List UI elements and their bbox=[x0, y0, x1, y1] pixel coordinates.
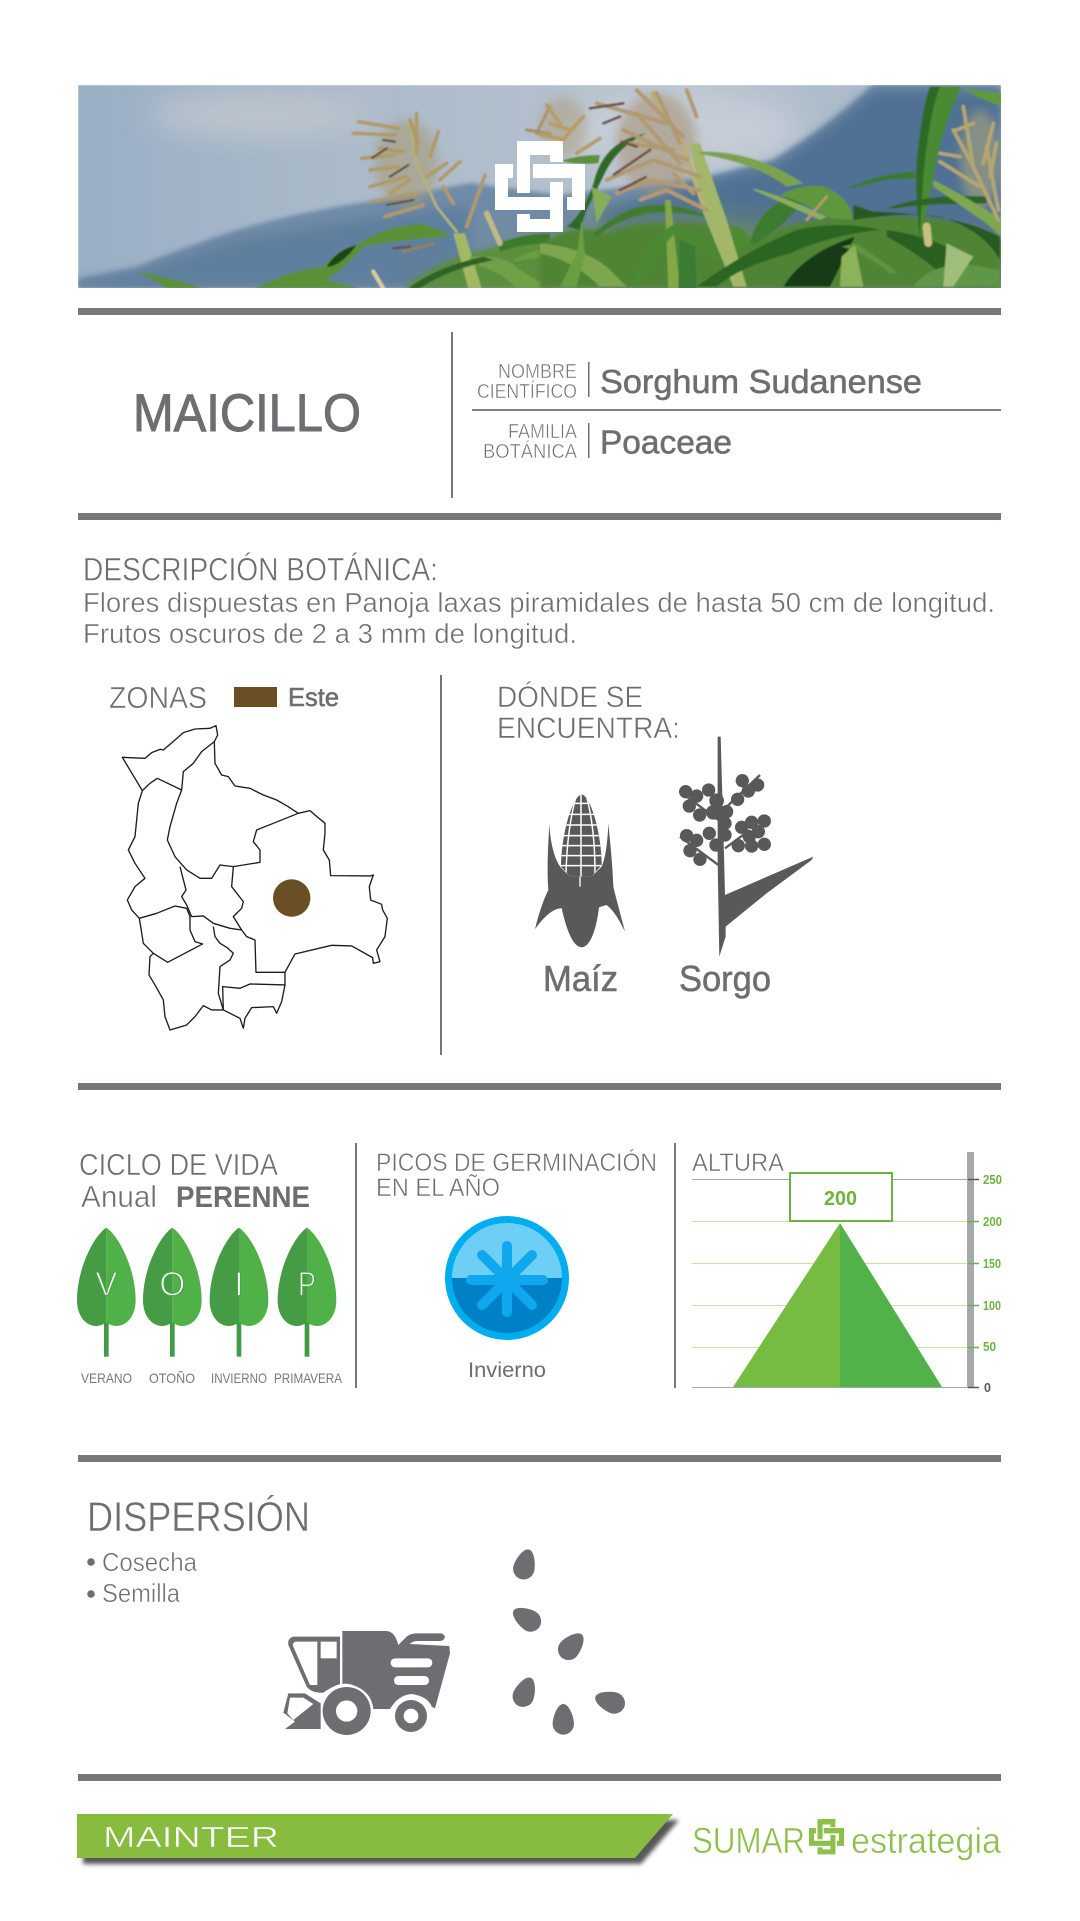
heading: altura: ALTURA bbox=[692, 1149, 784, 1177]
botanical family bbox=[483, 421, 732, 463]
height axis bbox=[967, 1152, 1002, 1395]
botanical family: Poaceae bbox=[600, 424, 732, 460]
season labels: INVIERNO bbox=[211, 1370, 267, 1386]
height axis: 250 bbox=[983, 1173, 1002, 1187]
season labels bbox=[81, 1370, 343, 1386]
value box: 200: 200 bbox=[824, 1188, 857, 1210]
botanical family: FAMILIA bbox=[508, 421, 578, 443]
divider bar bbox=[78, 513, 1001, 520]
text: anual: Anual bbox=[81, 1179, 157, 1214]
panel: life cycle bbox=[77, 1147, 343, 1386]
divider bar bbox=[78, 308, 1001, 315]
leaf: verano: V bbox=[95, 1266, 117, 1304]
scientific name: Sorghum Sudanense bbox=[600, 363, 922, 400]
header photo: sorghum field and mountains bbox=[78, 85, 1002, 288]
leaf: invierno bbox=[210, 1228, 268, 1357]
heading: ciclo de vida: CICLO DE VIDA bbox=[79, 1147, 278, 1182]
heading: zonas: ZONAS bbox=[109, 680, 207, 715]
value box: 200 bbox=[790, 1173, 892, 1221]
heading: picos de germinacion: EN EL AÑO bbox=[376, 1173, 500, 1202]
height axis: 150 bbox=[983, 1257, 1001, 1271]
footer brand: sumar estrategia: estrategia bbox=[851, 1820, 1002, 1861]
label: sorgo: Sorgo bbox=[679, 958, 771, 999]
leaf: verano bbox=[77, 1228, 136, 1357]
text block: botanical description: Flores dispuestas en Panoja laxas piramidales de hasta 50 cm de longitud. bbox=[83, 587, 995, 618]
list: dispersal methods: Semilla bbox=[102, 1578, 180, 1608]
text block: botanical description bbox=[83, 552, 995, 649]
scientific name: CIENTÍFICO bbox=[477, 380, 577, 403]
panel: height chart bbox=[692, 1149, 1002, 1395]
panel: dispersal bbox=[87, 1493, 628, 1735]
text block: botanical description: Frutos oscuros de 2 a 3 mm de longitud. bbox=[83, 618, 577, 649]
zone marker bbox=[273, 879, 310, 917]
footer ribbon: mainter: MAINTER bbox=[103, 1822, 279, 1854]
heading: picos de germinacion bbox=[376, 1148, 657, 1202]
leaf: invierno: I bbox=[234, 1266, 244, 1304]
season labels: PRIMAVERA bbox=[274, 1370, 343, 1386]
label: invierno: Invierno bbox=[468, 1359, 546, 1382]
footer brand: sumar estrategia bbox=[692, 1819, 1002, 1861]
botanical family: BOTÁNICA bbox=[483, 440, 578, 463]
legend label: este: Este bbox=[288, 682, 339, 712]
height axis: 0 bbox=[984, 1381, 991, 1395]
text: perenne: PERENNE bbox=[176, 1181, 310, 1214]
divider bar bbox=[78, 1455, 1001, 1462]
leaf icons by season bbox=[77, 1228, 336, 1357]
divider bar bbox=[78, 1083, 1001, 1090]
scientific name bbox=[477, 361, 922, 403]
title: MAICILLO: MAICILLO bbox=[133, 384, 361, 443]
heading: picos de germinacion: PICOS DE GERMINACIÓN bbox=[376, 1148, 657, 1177]
heading: donde se encuentra: ENCUENTRA: bbox=[497, 712, 680, 745]
panel: plant name bbox=[133, 332, 1001, 498]
icon: seeds bbox=[508, 1547, 628, 1735]
height axis: 200 bbox=[983, 1215, 1002, 1229]
season labels: OTOÑO bbox=[149, 1370, 195, 1386]
height axis: 50 bbox=[983, 1340, 996, 1354]
plant height triangle bbox=[733, 1223, 942, 1387]
scientific name: NOMBRE bbox=[498, 361, 577, 383]
panel: zones map bbox=[109, 680, 387, 1030]
leaf: primavera bbox=[278, 1228, 336, 1357]
icon: sorghum bbox=[679, 737, 813, 957]
footer brand: sumar estrategia: SUMAR bbox=[692, 1820, 805, 1861]
height axis: 100 bbox=[983, 1299, 1001, 1313]
heading: donde se encuentra bbox=[497, 681, 680, 745]
panel: where found bbox=[497, 681, 813, 999]
leaf: primavera: P bbox=[298, 1266, 316, 1304]
icon: winter snowflake badge bbox=[445, 1216, 569, 1340]
footer ribbon: mainter bbox=[77, 1814, 679, 1864]
text block: botanical description: DESCRIPCIÓN BOTÁNICA: bbox=[83, 552, 438, 588]
panel: germination peaks bbox=[376, 1148, 657, 1382]
leaf: otono: O bbox=[159, 1266, 185, 1304]
heading: dispersion: DISPERSIÓN bbox=[87, 1493, 310, 1540]
divider bar bbox=[78, 1774, 1001, 1781]
map of Bolivia with departments bbox=[122, 726, 387, 1030]
legend swatch: este bbox=[234, 687, 277, 707]
leaf: otono bbox=[143, 1228, 202, 1357]
list: dispersal methods bbox=[87, 1547, 197, 1608]
icon: white Sumar logo over photo bbox=[495, 141, 585, 232]
label: maiz: Maíz bbox=[543, 958, 618, 999]
icon: corn bbox=[535, 794, 625, 947]
list: dispersal methods: Cosecha bbox=[102, 1547, 197, 1577]
heading: donde se encuentra: DÓNDE SE bbox=[497, 681, 643, 714]
season labels: VERANO bbox=[81, 1370, 132, 1386]
icon: combine harvester bbox=[283, 1631, 450, 1735]
